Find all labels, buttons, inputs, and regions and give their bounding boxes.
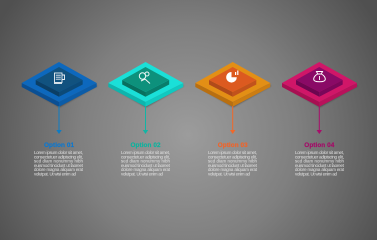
text block: dolore magna aliquam erat [295,167,345,172]
text block: consectetuer adipiscing elit, [208,154,257,159]
text block: dolore magna aliquam erat [208,167,258,172]
text block: Lorem ipsum dolor sit amet, [121,150,170,155]
text block: Lorem ipsum dolor sit amet, [34,150,83,155]
text block: euismod tincidunt ut laoreet [121,163,171,168]
icon: layered magenta diamond [282,62,358,108]
text block: consectetuer adipiscing elit, [121,154,170,159]
icon: layered teal diamond [108,62,184,108]
arrow [317,106,322,134]
text block [295,150,345,176]
heading: option 01: Option 01 [44,142,74,149]
text block: sed diam nonummy nibh [121,159,171,164]
text block: Lorem ipsum dolor sit amet, [295,150,344,155]
text block: volutpat. Ut wisi enim ad [121,172,164,176]
text block [34,150,84,176]
text block [121,150,171,176]
text block: euismod tincidunt ut laoreet [295,163,345,168]
text block: sed diam nonummy nibh [34,159,84,164]
icon: document and mug [54,73,64,83]
icon: pie chart [226,70,238,83]
arrow [230,106,235,134]
text block: euismod tincidunt ut laoreet [34,163,84,168]
panel: option 01 [22,62,98,176]
text block [208,150,258,176]
text block: consectetuer adipiscing elit, [295,154,344,159]
panel: option 03 [195,62,271,176]
heading: option 03: Option 03 [218,142,248,149]
icon: layered blue diamond [22,62,98,108]
heading: option 02: Option 02 [130,142,161,149]
text block: consectetuer adipiscing elit, [34,154,83,159]
text block: volutpat. Ut wisi enim ad [295,172,338,176]
text block: Lorem ipsum dolor sit amet, [208,150,257,155]
text block: sed diam nonummy nibh [295,159,345,164]
text block: volutpat. Ut wisi enim ad [34,172,77,176]
text block: sed diam nonummy nibh [208,159,258,164]
icon: money bag [314,72,325,82]
panel: option 04 [282,62,358,176]
panel: option 02 [108,62,184,176]
text block: dolore magna aliquam erat [34,167,84,172]
arrow [143,106,148,134]
heading: option 04: Option 04 [304,142,335,149]
icon: layered orange diamond [195,62,271,108]
text block: euismod tincidunt ut laoreet [208,163,258,168]
icon: magnifier and gears [139,72,150,84]
arrow [56,106,62,134]
text block: dolore magna aliquam erat [121,167,171,172]
text block: volutpat. Ut wisi enim ad [208,172,251,176]
